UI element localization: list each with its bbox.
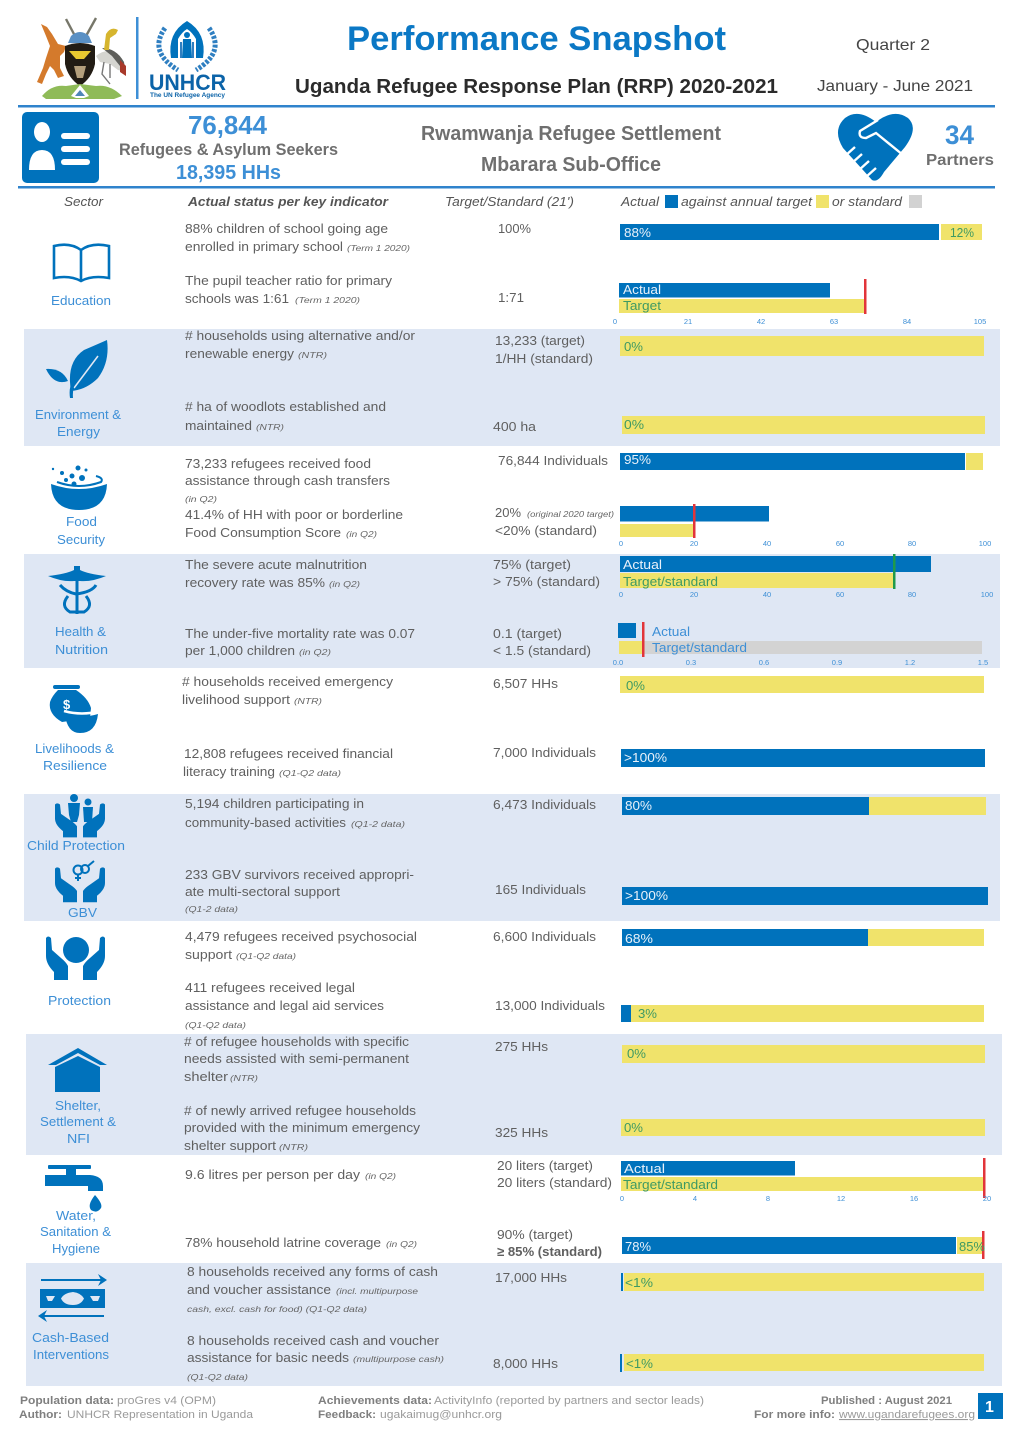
indicator text: legal assistance <box>185 980 385 1030</box>
bar: basic needs: <1% <box>626 1356 653 1371</box>
sector label: Energy <box>57 424 101 439</box>
chart: mortality: 0.9 <box>832 658 842 667</box>
indicator text: pupil teacher ratio <box>185 273 393 306</box>
sector label <box>40 1208 111 1256</box>
bar: semi-permanent shelter: 0% <box>627 1046 646 1061</box>
indicator text: under-five mortality <box>185 626 415 658</box>
indicator text: malnutrition: The severe acute malnutrition <box>185 557 367 572</box>
chart: litres per person: 20 <box>983 1194 991 1203</box>
households count: 18,395 HHs <box>176 162 281 184</box>
sector label: Security <box>57 532 106 547</box>
icon: refugee id card <box>22 112 99 183</box>
indicator text: food assistance: 73,233 refugees received food <box>185 456 371 471</box>
icon: bowl of food <box>51 466 107 510</box>
indicator text: psychosocial: 4,479 refugees received psychosocial <box>185 929 417 944</box>
chart: litres per person: 4 <box>693 1194 697 1203</box>
chart: malnutrition: 40 <box>763 590 771 599</box>
indicator text: enrolment: enrolled in primary school <box>185 239 343 254</box>
target: emergency livelihood: 6,507 HHs <box>493 676 559 691</box>
bar: financial literacy <box>621 749 985 767</box>
icon: hands holding circle <box>46 936 105 980</box>
indicator text: malnutrition: recovery rate was 85% <box>185 575 325 590</box>
indicator text: renewable energy: # households using alternative and/or <box>185 328 416 343</box>
icon: house <box>48 1048 107 1092</box>
bar: financial literacy: >100% <box>624 750 667 765</box>
panel: environment and energy <box>24 328 1000 446</box>
chart: pupil teacher ratio: 21 <box>684 317 692 326</box>
indicator text: enrolment: 88% children of school going age <box>185 221 388 236</box>
target: malnutrition: 75% (target) <box>493 557 571 572</box>
chart: latrine coverage: 78% <box>625 1239 651 1254</box>
logo: UNHCR <box>149 21 226 99</box>
bar: emergency shelter <box>621 1119 985 1136</box>
indicator text: under-five mortality: (in Q2) <box>299 647 331 657</box>
target: semi-permanent shelter: 275 HHs <box>495 1039 549 1054</box>
indicator text: basic needs: (Q1-Q2 data) <box>187 1372 248 1382</box>
bar: psychosocial <box>622 929 984 946</box>
column headers and legend: against annual target <box>681 194 813 209</box>
sector label <box>57 514 106 547</box>
indicator text: semi-permanent shelter: # of refugee households with specific <box>184 1034 410 1049</box>
chart: mortality: Target/standard <box>652 640 747 655</box>
indicator text: under-five mortality: The under-five mortality rate was 0.07 <box>185 626 415 641</box>
publication info <box>754 1395 975 1421</box>
bar: enrolment <box>620 224 982 240</box>
indicator text: psychosocial: support <box>185 947 232 962</box>
chart: litres per person: 16 <box>910 1194 918 1203</box>
page number: 1 <box>985 1399 994 1416</box>
indicator text: emergency livelihood: livelihood support <box>182 692 290 707</box>
chart: mortality: 1.5 <box>978 658 988 667</box>
chart: malnutrition <box>619 554 993 599</box>
indicator text: psychosocial: (Q1-Q2 data) <box>236 951 296 961</box>
indicator text: community-based activities <box>185 796 405 830</box>
logo: UNHCR: The UN Refugee Agency <box>150 93 226 99</box>
indicator text: renewable energy: (NTR) <box>298 350 327 360</box>
target: GBV: 165 Individuals <box>495 882 587 897</box>
population source: UNHCR Representation in Uganda <box>67 1409 254 1421</box>
achievements source: ugakaimug@unhcr.org <box>380 1409 502 1421</box>
chart: malnutrition: Actual <box>623 557 662 572</box>
target: basic needs: 8,000 HHs <box>493 1356 559 1371</box>
indicator text: food consumption: (in Q2) <box>346 529 377 539</box>
indicator text: any forms of cash: 8 households received any forms of cash <box>187 1264 438 1279</box>
indicator text: GBV survivors: ate multi-sectoral support <box>185 884 340 899</box>
chart: malnutrition: 80 <box>908 590 916 599</box>
sector label: Protection <box>48 993 111 1008</box>
chart: food consumption: 100 <box>979 539 991 548</box>
column headers and legend: Sector <box>64 194 104 209</box>
column headers and legend: Actual status per key indicator <box>187 194 389 209</box>
indicator text: food assistance: assistance through cash transfers <box>185 473 391 488</box>
chart: pupil teacher ratio: 105 <box>974 317 986 326</box>
target: any forms of cash: 17,000 HHs <box>495 1270 568 1285</box>
bar: renewable energy <box>620 336 984 356</box>
sector label: Shelter, <box>55 1098 101 1113</box>
sector label: Hygiene <box>52 1241 100 1256</box>
indicator text: legal assistance: assistance and legal aid services <box>185 998 385 1013</box>
indicator text: financial literacy: 12,808 refugees received financial <box>184 746 393 761</box>
target: woodlots: 400 ha <box>493 419 537 434</box>
indicator text: community-based activities: 5,194 children participating in <box>185 796 364 811</box>
indicator text: GBV survivors: 233 GBV survivors received appropri- <box>185 867 414 882</box>
chart: malnutrition: Target/standard <box>623 574 718 589</box>
chart: food consumption: 0 <box>619 539 623 548</box>
chart: malnutrition: 100 <box>981 590 993 599</box>
indicator text: any forms of cash <box>187 1264 438 1314</box>
chart: food consumption: 80 <box>908 539 916 548</box>
chart: malnutrition: 60 <box>836 590 844 599</box>
sector label: Nutrition <box>55 642 108 657</box>
bar: enrolment: 12% <box>950 225 974 240</box>
panel: livelihoods and resilience <box>35 674 985 779</box>
icon: handshake heart <box>838 114 913 181</box>
chart: food consumption <box>619 504 991 548</box>
icon: book <box>54 245 109 281</box>
chart: food consumption: 40 <box>763 539 771 548</box>
target: malnutrition: > 75% (standard) <box>493 574 600 589</box>
population source: Population data: <box>20 1395 114 1407</box>
sub-office name: Mbarara Sub-Office <box>481 154 661 176</box>
target: litres: 20 liters (standard) <box>497 1175 612 1190</box>
achievements source: Achievements data: <box>318 1395 432 1407</box>
indicator text: woodlots <box>185 399 386 433</box>
target: emergency shelter: 325 HHs <box>495 1125 549 1140</box>
chart: pupil teacher ratio: Target <box>623 298 661 313</box>
header rule top <box>18 105 995 108</box>
indicator text: woodlots: # ha of woodlots established and <box>185 399 386 414</box>
target: financial literacy: 7,000 Individuals <box>493 745 597 760</box>
publication info: Published : August 2021 <box>821 1395 952 1407</box>
column headers and legend: or standard <box>832 194 903 209</box>
panel: protection <box>46 929 984 1030</box>
chart: litres per person: Target/standard <box>623 1177 718 1192</box>
chart: litres per person: 8 <box>766 1194 770 1203</box>
indicator text: malnutrition <box>185 557 367 590</box>
bar: community activities <box>622 797 986 815</box>
icon: hands with gender symbol <box>55 861 105 902</box>
bar: psychosocial: 68% <box>625 931 653 946</box>
bar: community activities: 80% <box>625 798 652 813</box>
logo: Uganda coat of arms <box>37 18 126 99</box>
indicator text: emergency shelter: # of newly arrived refugee households <box>184 1103 417 1118</box>
panel: education <box>51 221 986 326</box>
bar: basic needs <box>620 1354 984 1372</box>
settlement name: Rwamwanja Refugee Settlement <box>421 123 721 145</box>
population count: 76,844 <box>188 110 268 140</box>
header <box>18 17 995 188</box>
icon: tap and drop <box>45 1165 103 1212</box>
indicator text: emergency livelihood <box>182 674 394 707</box>
target: renewable energy: 1/HH (standard) <box>495 351 593 366</box>
target: malnutrition <box>493 557 600 589</box>
sector label: Sanitation & <box>40 1224 111 1239</box>
icon: money bag and bowl <box>50 685 100 733</box>
target: renewable energy <box>495 333 593 366</box>
panel: child protection and GBV <box>24 794 1000 921</box>
achievements source: Feedback: <box>318 1409 376 1421</box>
indicator text: semi-permanent shelter: (NTR) <box>230 1073 258 1083</box>
target: mortality: < 1.5 (standard) <box>493 643 591 658</box>
panel: shelter settlement and NFI <box>26 1034 1002 1155</box>
bar: renewable energy: 0% <box>624 339 643 354</box>
indicator text: any forms of cash: and voucher assistance <box>187 1282 331 1297</box>
header rule bottom <box>18 186 995 188</box>
indicator text: pupil teacher ratio: schools was 1:61 <box>185 291 289 306</box>
indicator text: semi-permanent shelter: needs assisted with semi-permanent <box>184 1051 409 1066</box>
indicator text: enrolment: (Term 1 2020) <box>347 243 410 253</box>
indicator text: latrine coverage: 78% household latrine coverage <box>185 1235 381 1250</box>
indicator text: legal assistance: (Q1-Q2 data) <box>185 1020 246 1030</box>
indicator text: malnutrition: (in Q2) <box>329 579 360 589</box>
chart: pupil teacher ratio: 0 <box>613 317 617 326</box>
indicator text: community-based activities: community-based activities <box>185 815 347 830</box>
target: ratio: 1:71 <box>498 290 524 305</box>
bar: any forms of cash <box>621 1273 984 1291</box>
indicator text: pupil teacher ratio: The pupil teacher ratio for primary <box>185 273 393 288</box>
chart: food consumption: 20 <box>690 539 698 548</box>
title: Performance Snapshot <box>347 20 726 58</box>
icon: banknote with arrows <box>38 1274 107 1322</box>
target: food consumption: 20% <box>495 505 521 520</box>
chart: latrine coverage <box>622 1231 985 1259</box>
icon: money bag and bowl: $ <box>63 697 71 712</box>
indicator text: any forms of cash: cash, excl. cash for food) (Q1-Q2 data) <box>187 1304 367 1314</box>
target: food assistance: 76,844 Individuals <box>498 453 609 468</box>
sector label: Resilience <box>43 758 107 773</box>
indicator text: financial literacy: literacy training <box>183 764 275 779</box>
sector label: Environment & <box>35 407 121 422</box>
indicator text: basic needs: assistance for basic needs <box>187 1350 350 1365</box>
indicator text: food assistance: (in Q2) <box>185 494 217 504</box>
sector label: Food <box>66 514 97 529</box>
chart: malnutrition: 20 <box>690 590 698 599</box>
page number <box>978 1393 1003 1419</box>
indicator text: basic needs <box>187 1333 444 1382</box>
target: renewable energy: 13,233 (target) <box>495 333 585 348</box>
indicator text: emergency livelihood: # households received emergency <box>182 674 394 689</box>
chart: litres per person: 0 <box>620 1194 624 1203</box>
target: enrolment: 100% <box>498 221 531 236</box>
chart: latrine coverage: 85% <box>959 1239 985 1254</box>
sector label: Settlement & <box>40 1114 116 1129</box>
logo: UNHCR: UNHCR <box>149 70 226 95</box>
indicator text: financial literacy: (Q1-Q2 data) <box>279 768 341 778</box>
panel: food security <box>51 452 991 548</box>
indicator text: food consumption: 41.4% of HH with poor or borderline <box>185 507 403 522</box>
panel: water sanitation and hygiene <box>40 1158 991 1259</box>
bar: woodlots: 0% <box>624 417 644 432</box>
population source: Author: <box>19 1409 62 1421</box>
indicator text: pupil teacher ratio: (Term 1 2020) <box>295 295 360 305</box>
indicator text: woodlots: (NTR) <box>256 422 284 432</box>
indicator text: enrolment <box>185 221 410 254</box>
chart: malnutrition: 0 <box>619 590 623 599</box>
indicator text: GBV survivors: (Q1-2 data) <box>185 904 238 914</box>
indicator text: litres per person: 9.6 litres per person per day <box>185 1167 361 1182</box>
bar: semi-permanent shelter <box>622 1045 985 1063</box>
chart: pupil teacher ratio: 63 <box>830 317 838 326</box>
chart: mortality: 0.0 <box>613 658 623 667</box>
indicator text: semi-permanent shelter <box>184 1034 410 1084</box>
period: January - June 2021 <box>817 78 973 95</box>
column headers and legend <box>64 194 922 209</box>
indicator text: latrine coverage: (in Q2) <box>386 1239 417 1249</box>
indicator text: semi-permanent shelter: shelter <box>184 1069 229 1084</box>
sector label <box>35 407 121 439</box>
sector label <box>32 1330 110 1362</box>
publication info: For more info: <box>754 1409 835 1421</box>
bar: woodlots <box>622 416 985 434</box>
icon: leaf <box>46 340 108 398</box>
chart: pupil teacher ratio: 42 <box>757 317 765 326</box>
chart: mortality: 1.2 <box>905 658 915 667</box>
footer <box>19 1393 1003 1421</box>
indicator text: food assistance <box>185 456 391 504</box>
bar: emergency livelihood: 0% <box>626 678 645 693</box>
column headers and legend: Actual <box>620 194 660 209</box>
target: community activities: 6,473 Individuals <box>493 797 597 812</box>
indicator text: renewable energy: renewable energy <box>185 346 295 361</box>
target: litres: 20 liters (target) <box>497 1158 593 1173</box>
chart: litres per person <box>620 1158 991 1203</box>
bar: GBV: >100% <box>625 888 668 903</box>
indicator text: emergency shelter: (NTR) <box>279 1142 308 1152</box>
bar: food assistance <box>620 452 983 470</box>
population source <box>19 1395 254 1421</box>
chart: food consumption: 60 <box>836 539 844 548</box>
indicator text: emergency shelter: shelter support <box>184 1138 276 1153</box>
sector label: Education <box>51 293 111 308</box>
target: mortality: 0.1 (target) <box>493 626 562 641</box>
sector label: Water, <box>56 1208 96 1223</box>
sector label <box>55 624 108 657</box>
sector label: Child Protection <box>27 838 125 853</box>
partners label: Partners <box>926 152 994 169</box>
sector label <box>40 1098 116 1146</box>
target: mortality <box>493 626 591 658</box>
target: latrine: ≥ 85% (standard) <box>497 1244 602 1259</box>
bar: GBV <box>622 887 988 905</box>
quarter: Quarter 2 <box>856 37 930 54</box>
chart: mortality: Actual <box>652 624 690 639</box>
sector label: GBV <box>68 905 97 920</box>
chart: litres per person: 12 <box>837 1194 845 1203</box>
population source: proGres v4 (OPM) <box>117 1395 216 1407</box>
target: food consumption: (original 2020 target) <box>527 509 614 519</box>
indicator text: food consumption: Food Consumption Score <box>185 525 341 540</box>
indicator text: basic needs: 8 households received cash and voucher <box>187 1333 440 1348</box>
target: latrine: 90% (target) <box>497 1227 573 1242</box>
chart: pupil teacher ratio: 84 <box>903 317 911 326</box>
population label: Refugees & Asylum Seekers <box>119 140 338 159</box>
indicator text: under-five mortality: per 1,000 children <box>185 643 295 658</box>
indicator text: food consumption <box>185 507 403 540</box>
bar: enrolment: 88% <box>624 225 651 240</box>
bar: food assistance: 95% <box>624 452 651 467</box>
indicator text: emergency livelihood: (NTR) <box>294 696 322 706</box>
indicator text: litres per person: (in Q2) <box>365 1171 396 1181</box>
publication info: www.ugandarefugees.org <box>838 1409 975 1421</box>
target: litres <box>497 1158 612 1190</box>
target: psychosocial: 6,600 Individuals <box>493 929 597 944</box>
chart: mortality: 0.3 <box>686 658 696 667</box>
achievements source <box>318 1395 704 1421</box>
icon: hands with children <box>55 794 105 837</box>
target: food consumption <box>495 505 614 538</box>
achievements source: ActivityInfo (reported by partners and sector leads) <box>434 1395 704 1407</box>
bar: legal <box>621 1005 984 1022</box>
bar: any forms of cash: <1% <box>625 1275 653 1290</box>
indicator text: community-based activities: (Q1-2 data) <box>351 819 405 829</box>
target: latrine <box>497 1227 602 1259</box>
chart: pupil teacher ratio <box>613 279 986 326</box>
bar: legal: 3% <box>638 1006 657 1021</box>
chart: mortality <box>613 622 988 667</box>
bar: emergency shelter: 0% <box>624 1120 643 1135</box>
target: food consumption: <20% (standard) <box>495 523 597 538</box>
indicator text: emergency shelter <box>184 1103 421 1153</box>
chart: litres per person: Actual <box>624 1161 665 1176</box>
indicator text: psychosocial <box>185 929 417 962</box>
chart: pupil teacher ratio: Actual <box>623 282 661 297</box>
indicator text: woodlots: maintained <box>185 418 252 433</box>
bar: emergency livelihood <box>620 676 984 693</box>
indicator text: financial literacy <box>183 746 393 779</box>
sector label: Interventions <box>33 1347 110 1362</box>
logo divider <box>136 17 138 99</box>
indicator text: GBV survivors <box>185 867 414 914</box>
panel: cash-based interventions <box>26 1263 1002 1386</box>
column headers and legend: Target/Standard (21') <box>445 194 574 209</box>
sector label: NFI <box>67 1131 90 1146</box>
indicator text: emergency shelter: provided with the minimum emergency <box>184 1120 421 1135</box>
indicator text: basic needs: (multipurpose cash) <box>353 1354 444 1364</box>
panel: health and nutrition <box>24 554 1000 668</box>
icon: caduceus <box>48 566 106 614</box>
target: legal: 13,000 Individuals <box>495 998 606 1013</box>
subtitle: Uganda Refugee Response Plan (RRP) 2020-2021 <box>295 76 778 98</box>
indicator text: renewable energy <box>185 328 416 361</box>
indicator text: any forms of cash: (incl. multipurpose <box>336 1286 418 1296</box>
sector label: Cash-Based <box>32 1330 109 1345</box>
indicator text: legal assistance: 411 refugees received legal <box>185 980 355 995</box>
partners count: 34 <box>945 120 974 150</box>
sector label <box>35 741 114 773</box>
sector label: Livelihoods & <box>35 741 114 756</box>
chart: mortality: 0.6 <box>759 658 769 667</box>
sector label: Health & <box>55 624 106 639</box>
